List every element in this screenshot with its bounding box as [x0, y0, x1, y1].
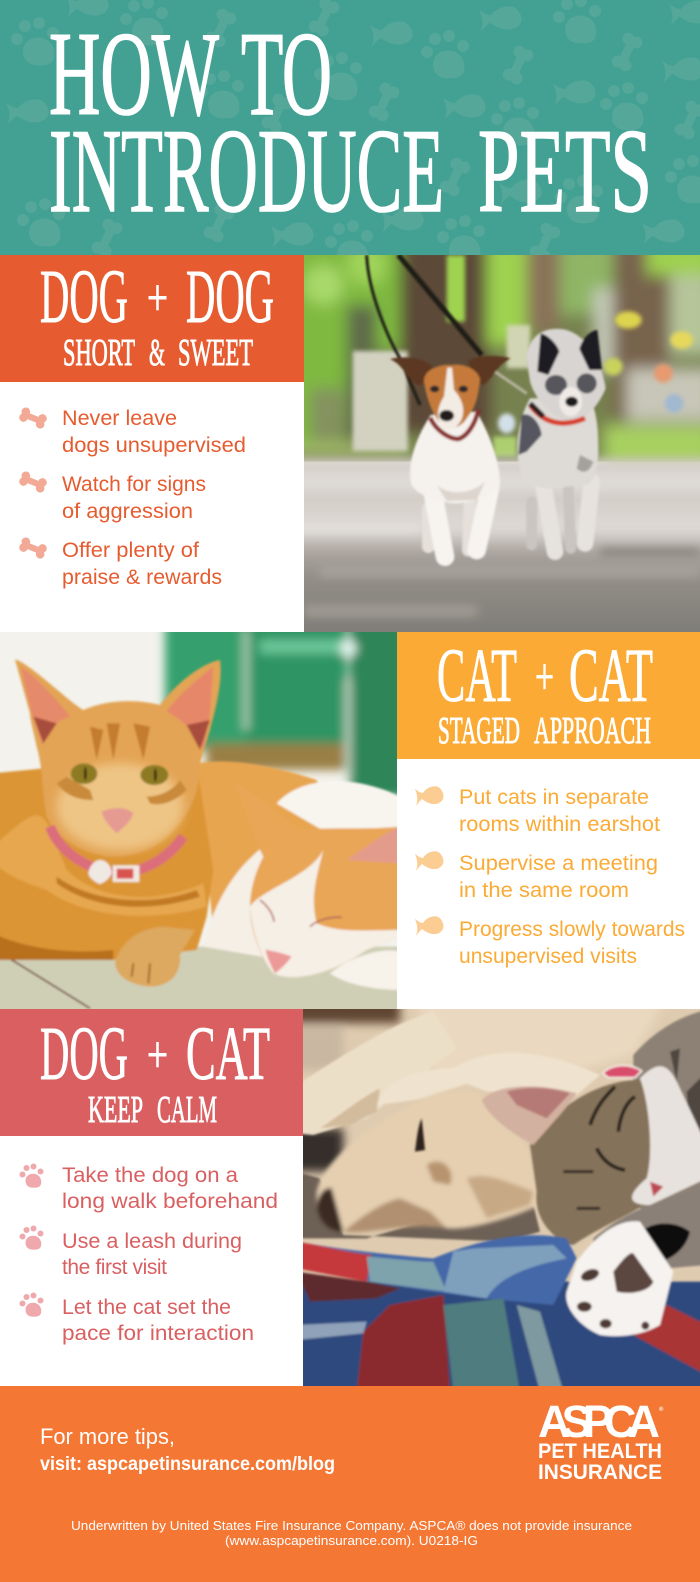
dog + cat heading: KEEP: [88, 1089, 143, 1131]
dog + cat heading: CALM: [157, 1089, 217, 1131]
title: [49, 7, 652, 237]
title: TO: [241, 7, 332, 140]
logo: ASPCA Pet Health Insurance: INSURANCE: [538, 1461, 662, 1484]
cat + cat heading: STAGED: [438, 710, 520, 752]
dog + dog heading: SWEET: [178, 332, 253, 374]
dog + cat tips: Let the cat set the: [62, 1296, 231, 1319]
dog head: [316, 1090, 542, 1232]
pink collar: [50, 827, 183, 873]
icon: fish bullets: [415, 786, 444, 936]
dog + cat heading: CAT: [186, 1012, 270, 1096]
dog + dog heading: +: [147, 270, 168, 327]
dog + dog tips: [62, 407, 246, 589]
dog + cat heading: [0, 1009, 303, 1136]
footer: [0, 1386, 700, 1582]
dog + dog heading: DOG: [186, 255, 274, 339]
dog + cat heading: +: [147, 1027, 168, 1084]
dog + dog tips: dogs unsupervised: [62, 434, 246, 457]
cat front leg and paw: [593, 1188, 700, 1268]
cat + cat tips: unsupervised visits: [459, 945, 637, 968]
front cat body: [0, 763, 213, 960]
disclaimer: [71, 1518, 632, 1548]
call to action: For more tips,: [40, 1424, 175, 1449]
dog + cat tips: pace for interaction: [62, 1322, 254, 1345]
dog + cat tips: [62, 1164, 278, 1345]
logo: ASPCA Pet Health Insurance: [538, 1396, 664, 1484]
dog + dog tips: Watch for signs: [62, 473, 206, 496]
dog + cat tips: Use a leash during: [62, 1230, 242, 1253]
logo: ASPCA Pet Health Insurance: ASPCA: [538, 1396, 660, 1447]
dog + cat tips: Take the dog on a: [62, 1164, 238, 1187]
dog + dog tips: of aggression: [62, 500, 193, 523]
header banner: [0, 0, 700, 268]
rear body of the sleeping cat: [197, 761, 333, 930]
dog fur and ear: [377, 1053, 600, 1105]
sleeping cat head: [235, 782, 400, 977]
cat + cat tips: Supervise a meeting: [459, 852, 658, 875]
terrier ears: [390, 357, 432, 385]
logo: ASPCA Pet Health Insurance: ®: [659, 1406, 664, 1413]
disclaimer: (www.aspcapetinsurance.com). U0218-IG: [225, 1533, 478, 1548]
call to action: visit: aspcapetinsurance.com/blog: [40, 1454, 335, 1475]
logo: ASPCA Pet Health Insurance: PET HEALTH: [538, 1440, 662, 1463]
paw: [115, 927, 195, 987]
photo: sleeping dog and cat: [303, 1009, 700, 1386]
blanket: [293, 1282, 700, 1392]
dog + cat tips: long walk beforehand: [62, 1190, 278, 1213]
dog + dog tips: praise & rewards: [62, 566, 222, 589]
ear interiors: [21, 667, 70, 747]
photo: two orange cats: [0, 632, 397, 1009]
ground: [297, 1172, 540, 1242]
photo: two dogs on leashes: [304, 255, 700, 632]
cat body: [633, 1010, 700, 1238]
panel: dog + cat: [0, 1009, 303, 1386]
dog + dog heading: [0, 255, 304, 382]
dog + dog heading: DOG: [40, 255, 128, 339]
icon: bone bullets: [18, 406, 48, 560]
cat head: [530, 1080, 679, 1245]
shaggy dog head: [526, 329, 606, 421]
dog + cat heading: DOG: [40, 1012, 128, 1096]
front cat head: [15, 659, 221, 857]
terrier head: [424, 365, 480, 428]
terrier body: [428, 502, 470, 550]
shaggy dog body: [532, 488, 571, 548]
cat + cat tips: rooms within earshot: [459, 813, 660, 836]
cat + cat tips: in the same room: [459, 879, 629, 902]
title: HOW: [49, 7, 219, 140]
dog + cat tips: the first visit: [62, 1256, 167, 1279]
cat + cat tips: Put cats in separate: [459, 786, 649, 809]
call to action: [40, 1424, 335, 1475]
dog + dog tips: Offer plenty of: [62, 539, 199, 562]
cat + cat tips: [459, 786, 685, 968]
dog leg: [297, 1012, 457, 1135]
cat + cat heading: +: [535, 649, 554, 706]
leash strokes: [367, 255, 420, 405]
tag on the cat: [603, 1065, 642, 1078]
disclaimer: Underwritten by United States Fire Insurance Company. ASPCA® does not provide insurance: [71, 1518, 632, 1533]
background pet pattern: [6, 0, 700, 268]
panel: cat + cat: [397, 632, 700, 1009]
floor: [0, 947, 407, 1017]
face markings: [90, 723, 150, 760]
dog + dog heading: SHORT: [63, 332, 135, 374]
dog + dog heading: &: [149, 332, 165, 374]
panel: dog + dog: [0, 255, 304, 632]
cat + cat heading: CAT: [437, 634, 517, 718]
cat ear: [482, 1086, 577, 1145]
dog + dog tips: Never leave: [62, 407, 177, 430]
cat + cat heading: [397, 632, 700, 759]
icon: paw bullets: [20, 1164, 44, 1317]
cat + cat tips: Progress slowly towards: [459, 918, 685, 941]
